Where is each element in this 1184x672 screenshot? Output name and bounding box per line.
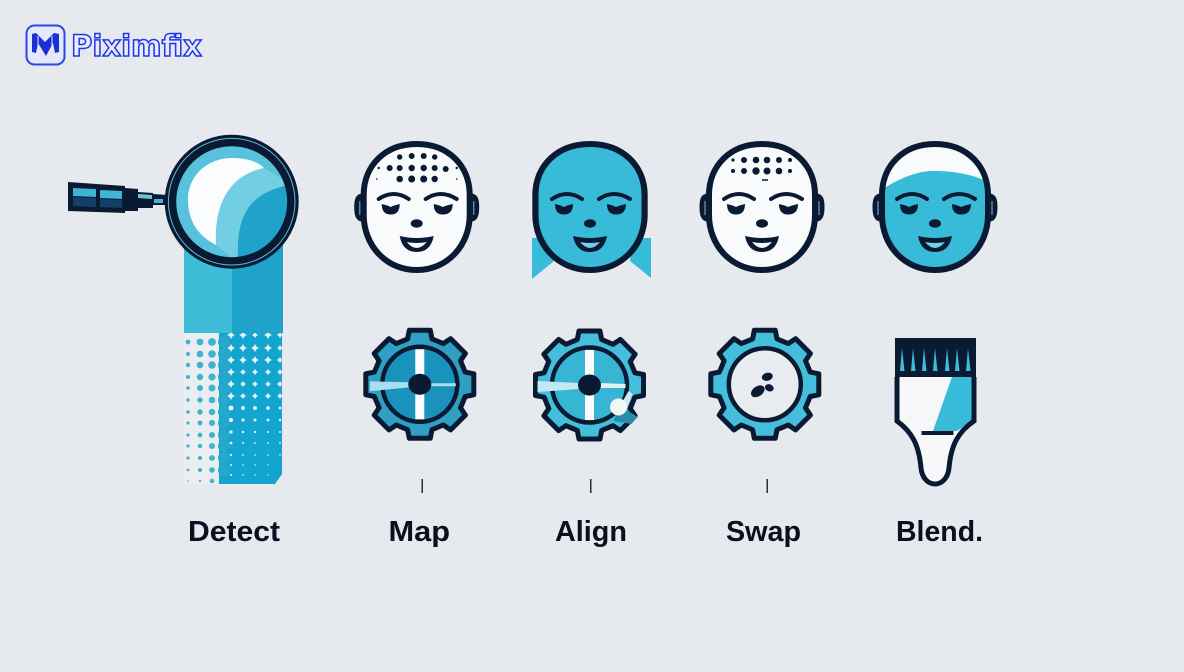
face 1: Map, white with dots: [357, 144, 477, 270]
bristles: [900, 348, 970, 371]
gear 1: Map: [366, 330, 474, 438]
magnifier lens: [168, 138, 300, 265]
label: Detect: Detect: [188, 516, 280, 548]
logo icon: [26, 26, 64, 64]
labels: [188, 516, 983, 548]
gear 3: Swap: [711, 330, 819, 438]
face 3: Swap, white with dots: [702, 144, 822, 270]
gear 2: Align: [536, 331, 644, 439]
magnifier handle: [68, 182, 168, 213]
landmark dots: [731, 157, 792, 181]
handle knob: [610, 391, 638, 424]
label: Swap: Swap: [726, 516, 801, 548]
logo: Piximfix: [26, 26, 202, 64]
face 2: Align, teal with collar: [532, 144, 651, 279]
tick marks: [422, 479, 768, 493]
step 1: Detect magnifier and bar: [68, 138, 300, 484]
label: Map: Map: [388, 516, 450, 548]
label: Align: Align: [555, 516, 627, 548]
logo wordmark: Piximfix: [71, 29, 202, 63]
collar: [532, 238, 651, 279]
label: Blend.: Blend.: [896, 516, 983, 548]
face 4: Blend, teal with white top: [875, 144, 995, 277]
landmark dots: [376, 153, 458, 182]
brush: Blend: [895, 338, 976, 484]
halftone fade: [184, 331, 283, 484]
solid bar: [184, 240, 283, 333]
